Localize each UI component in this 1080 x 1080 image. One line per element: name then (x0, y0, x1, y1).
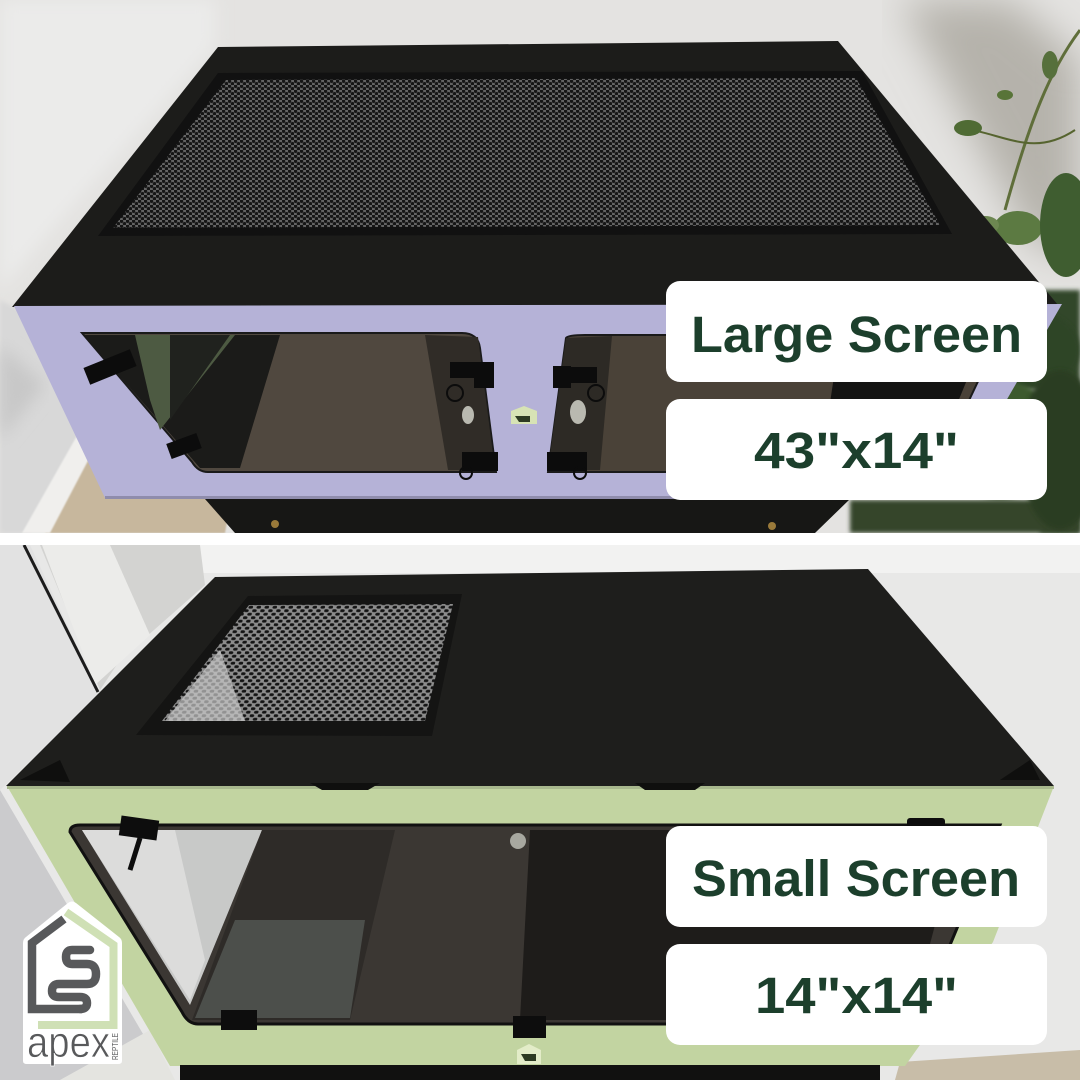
base below cabinet (180, 1065, 880, 1080)
cabinet lid (12, 41, 1058, 307)
front panel purple (14, 304, 1062, 498)
wall background (0, 545, 1080, 1080)
logo green house outline (38, 912, 114, 1025)
label: Large Screen (666, 281, 1047, 382)
white divider between photos (0, 533, 1080, 545)
cabinet lid (6, 569, 1054, 786)
logo wordmark: apex (27, 1018, 110, 1067)
panel: small screen photo (0, 545, 1080, 1080)
right window (548, 335, 1000, 472)
large mesh screen (98, 71, 952, 236)
plant foliage (850, 30, 1080, 533)
panel: large screen photo (0, 0, 1080, 533)
left window (82, 333, 496, 472)
label: Large Screen: Large Screen (691, 306, 1022, 363)
floor (46, 460, 228, 533)
label: large screen size (666, 399, 1047, 500)
label: Small Screen: Small Screen (692, 850, 1020, 907)
label: large screen size: 43"x14" (754, 422, 959, 479)
wall background (0, 0, 1080, 533)
logo snake (52, 950, 96, 1009)
logo: Apex Reptile (23, 902, 122, 1067)
label: small screen size (666, 944, 1047, 1045)
logo dark house outline (32, 919, 82, 1009)
small mesh screen (136, 594, 462, 736)
small logo badge on door (511, 406, 537, 424)
front panel green (7, 786, 1054, 1066)
logo reptile wordmark: REPTILE (111, 1033, 120, 1060)
hinges left (83, 349, 498, 479)
hinges and lock (119, 815, 945, 1038)
label: Small Screen (666, 826, 1047, 927)
base below cabinet (205, 499, 850, 533)
hinges right (547, 366, 604, 479)
lid corner brackets (20, 760, 1040, 790)
front window (70, 825, 1000, 1024)
label: small screen size: 14"x14" (755, 967, 958, 1024)
small logo badge on door (517, 1044, 541, 1064)
